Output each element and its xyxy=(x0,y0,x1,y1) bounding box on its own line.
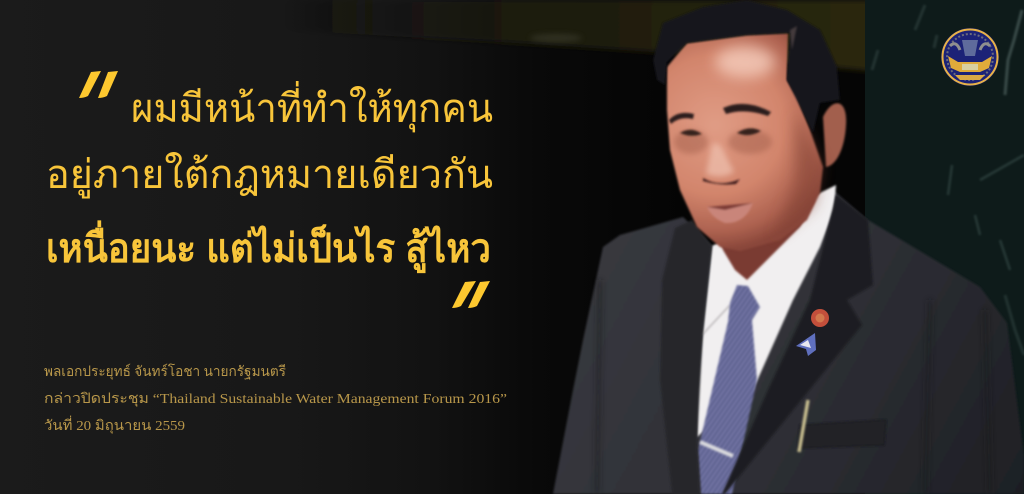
face xyxy=(667,33,823,251)
event: กล่าวปิดประชุม “Thailand Sustainable Water Management Forum 2016” xyxy=(44,392,507,407)
marble wall xyxy=(865,0,1024,494)
jacket xyxy=(553,190,1024,494)
lapel pins xyxy=(796,309,829,356)
quote line 3 bold: เหนื่อยนะ แต่ไม่เป็นไร สู้ไหว xyxy=(46,220,491,273)
breast pocket and pen xyxy=(798,400,886,452)
right lapel xyxy=(722,195,873,494)
right eyebrow xyxy=(723,104,771,116)
shirt collar xyxy=(697,185,836,437)
hair highlight xyxy=(790,26,797,50)
quote line 2: อยู่ภายใต้กฎหมายเดียวกัน xyxy=(46,151,493,198)
neck xyxy=(715,200,815,280)
opening quote mark xyxy=(79,71,118,98)
tie clip xyxy=(700,442,733,456)
forehead highlight xyxy=(715,46,775,78)
left lapel xyxy=(660,220,712,494)
quote text xyxy=(46,81,493,273)
attribution text xyxy=(44,363,507,434)
eye sockets xyxy=(674,130,772,154)
left eye xyxy=(680,130,702,136)
left eyebrow xyxy=(669,113,694,124)
speaker name: พลเอกประยุทธ์ จันทร์โอชา นายกรัฐมนตรี xyxy=(44,363,286,380)
collar fold xyxy=(702,305,730,335)
quote line 1: ผมมีหน้าที่ทำให้ทุกคน xyxy=(131,81,493,133)
portrait of speaker xyxy=(553,0,1024,494)
hair xyxy=(653,0,840,133)
necktie xyxy=(698,285,760,494)
closing quote mark xyxy=(452,281,490,308)
date: วันที่ 20 มิถุนายน 2559 xyxy=(44,416,185,434)
right eye xyxy=(737,128,761,135)
government seal xyxy=(941,28,999,86)
mouth xyxy=(707,203,753,223)
ear xyxy=(823,103,846,167)
nose xyxy=(703,143,740,185)
cheek shading xyxy=(775,110,822,238)
